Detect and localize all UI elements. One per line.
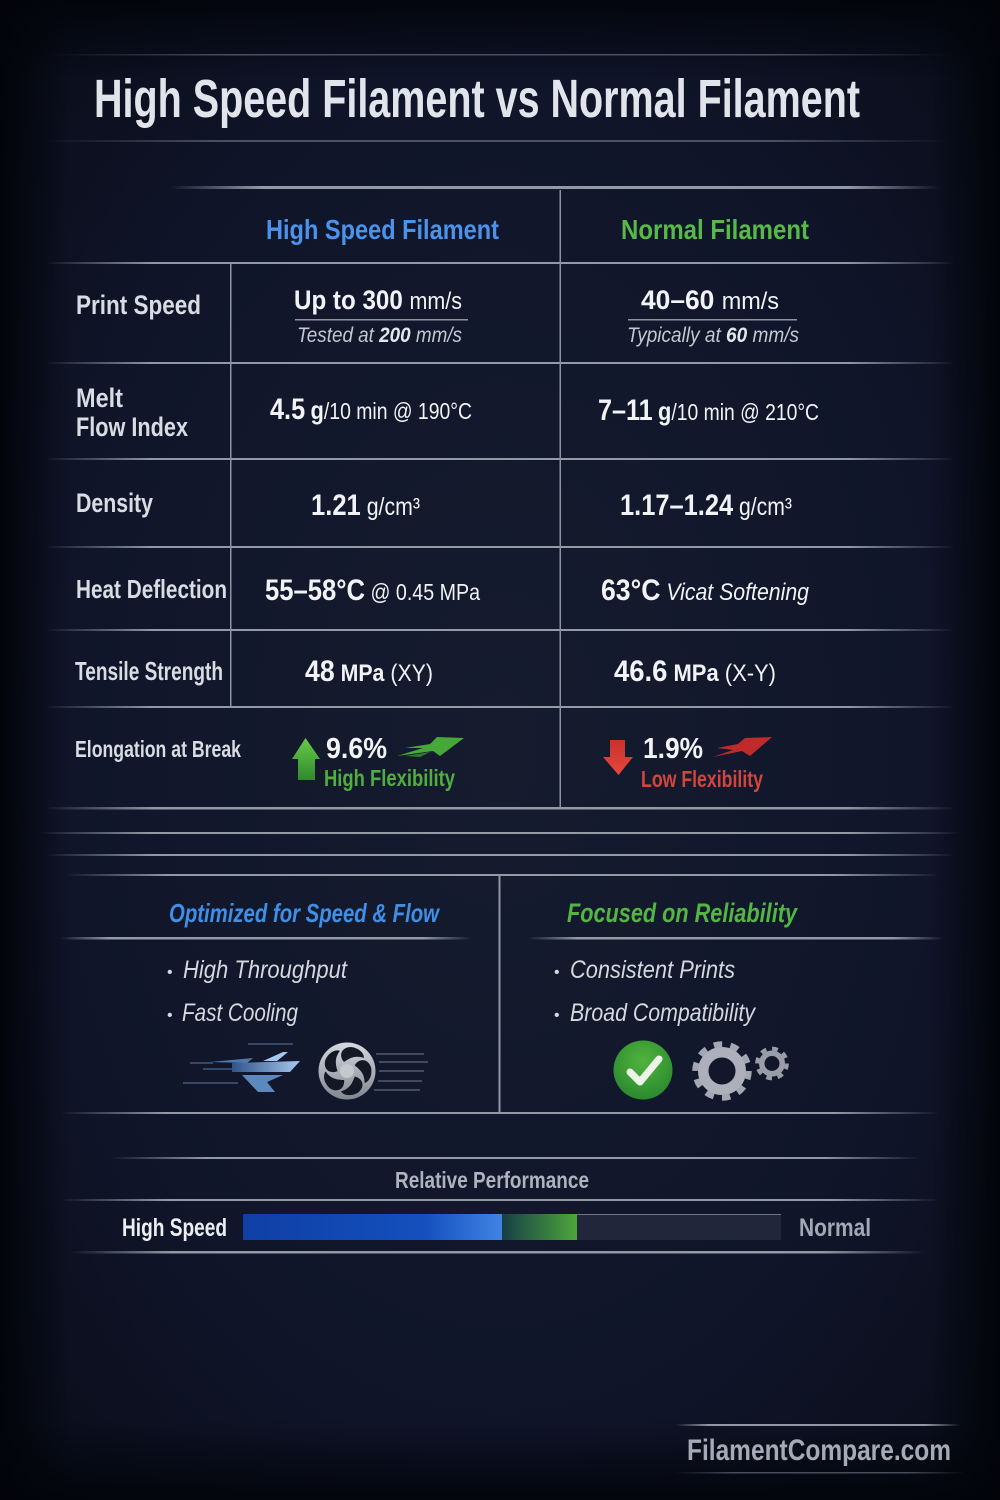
panel: focused on reliability [554, 898, 799, 1100]
row: elongation at break: Low Flexibility [641, 766, 763, 792]
row: melt flow index: Melt [76, 383, 123, 413]
row: melt flow index: Flow Index [76, 412, 188, 442]
row: density [76, 488, 792, 522]
bar [243, 1214, 781, 1240]
column heading: normal filament: Normal Filament [621, 214, 809, 245]
bullet list: speed: High Throughput [183, 956, 348, 984]
icon: speed jet [183, 1044, 300, 1092]
bullet list: reliability [554, 956, 756, 1027]
icon: green up arrow [292, 738, 320, 780]
row: melt flow index: 7–11 g/10 min @ 210°C [598, 394, 819, 427]
column heading: high speed filament: High Speed Filament [266, 214, 499, 245]
bullet list: speed: • [167, 1007, 173, 1024]
row: elongation at break: 9.6% [326, 733, 387, 765]
icon: cooling fan [318, 1042, 428, 1100]
icon: large gear [695, 1044, 749, 1098]
row: heat deflection: 63°C Vicat Softening [601, 574, 810, 607]
bullet list: reliability: • [554, 964, 560, 981]
icon: red speed arrow [713, 737, 772, 757]
row: tensile strength: 46.6 MPa (X-Y) [614, 655, 776, 688]
row: print speed [76, 285, 799, 347]
row: heat deflection: 55–58°C @ 0.45 MPa [265, 574, 480, 607]
row: print speed: Print Speed [76, 290, 201, 320]
panel: optimized for speed and flow [167, 898, 440, 1100]
heading: optimized: Optimized for Speed & Flow [169, 898, 440, 928]
icon: red down arrow [603, 740, 633, 775]
row: print speed: Typically at 60 mm/s [627, 324, 799, 347]
row: density: Density [76, 488, 153, 518]
row: elongation at break: 1.9% [643, 733, 703, 765]
chart title: Relative Performance [395, 1167, 589, 1193]
icon: green speed arrow [397, 737, 464, 757]
relative performance bar chart [122, 1167, 871, 1242]
row: density: 1.17–1.24 g/cm³ [620, 489, 792, 522]
row: print speed: Up to 300 mm/s [294, 285, 462, 315]
row: tensile strength: Tensile Strength [75, 656, 223, 686]
row: elongation at break: Elongation at Break [75, 736, 241, 762]
row: elongation at break: High Flexibility [324, 765, 455, 791]
bullet list: reliability: • [554, 1007, 560, 1024]
row: heat deflection: Heat Deflection [76, 574, 227, 604]
icon: small gear [757, 1049, 787, 1078]
row: melt flow index: 4.5 g/10 min @ 190°C [270, 393, 472, 426]
bullet list: speed: • [167, 964, 173, 981]
comparison table [75, 214, 819, 792]
row: print speed: 40–60 mm/s [641, 285, 779, 315]
row: density: 1.21 g/cm³ [311, 489, 420, 522]
row: tensile strength: 48 MPa (XY) [305, 655, 433, 688]
row: print speed: Tested at 200 mm/s [297, 324, 462, 347]
row: heat deflection [76, 574, 810, 607]
row: elongation at break [75, 733, 772, 792]
row: tensile strength [75, 655, 776, 688]
bullet list: reliability: Consistent Prints [570, 956, 735, 984]
bullet list: speed [167, 956, 348, 1027]
bullet list: speed: Fast Cooling [182, 999, 298, 1027]
row: melt flow index [76, 383, 819, 442]
icon: green check [614, 1040, 672, 1100]
bullet list: reliability: Broad Compatibility [570, 999, 756, 1027]
heading: reliability: Focused on Reliability [567, 898, 799, 928]
label: high speed: High Speed [122, 1214, 227, 1242]
label: normal: Normal [799, 1214, 871, 1242]
